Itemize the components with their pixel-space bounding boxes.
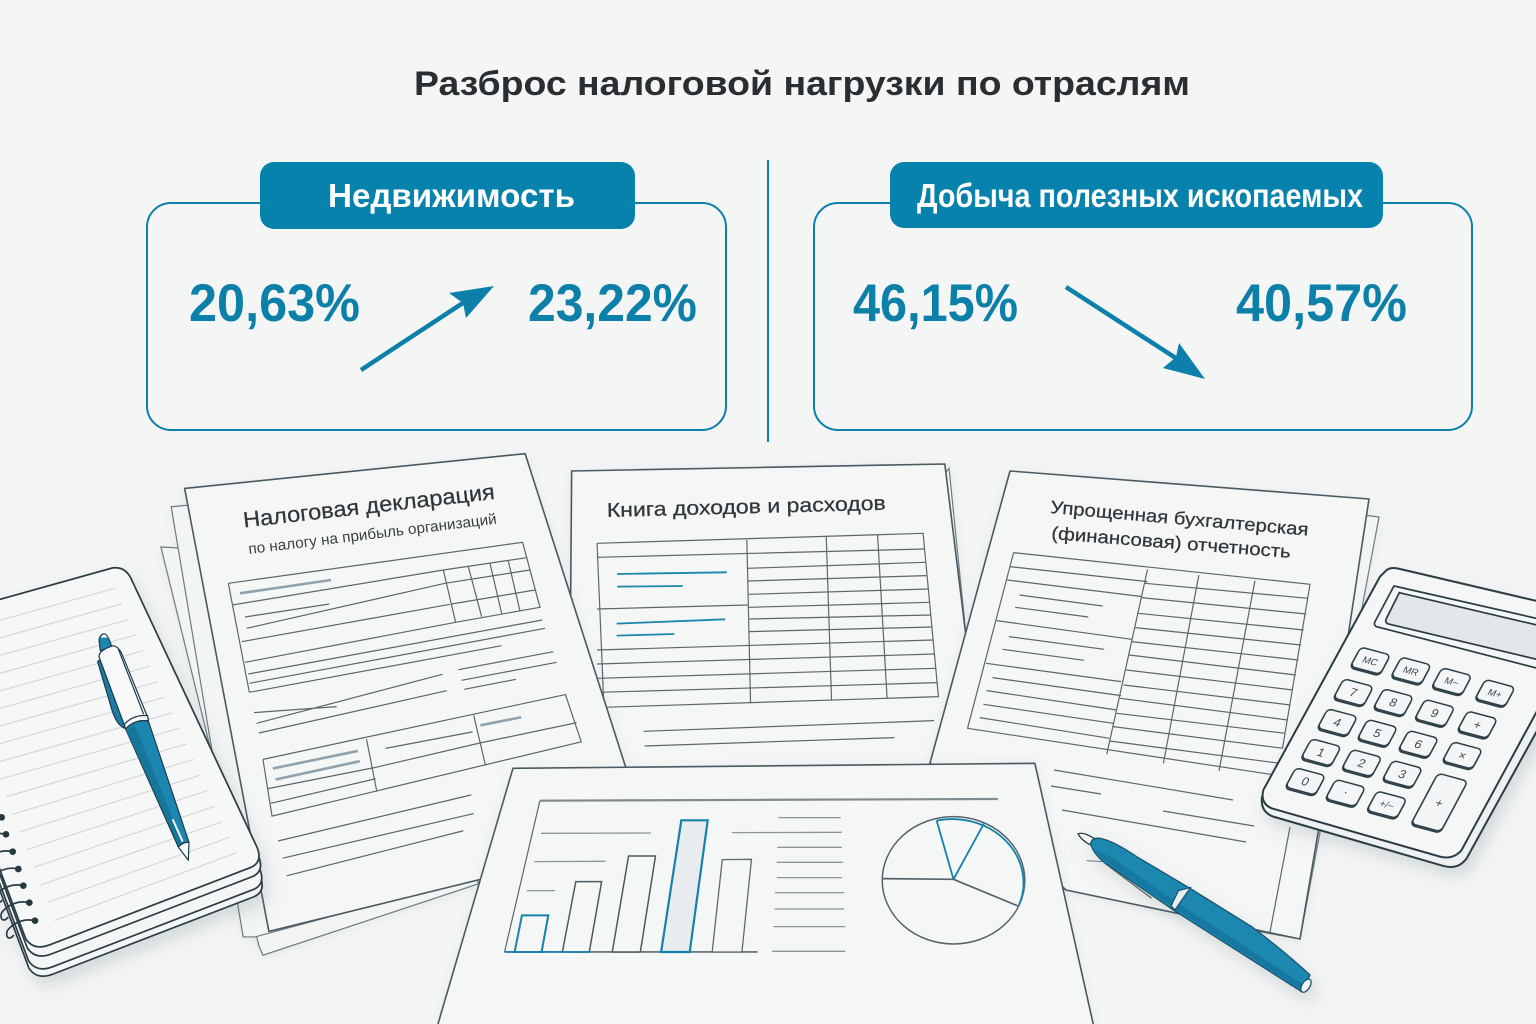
document title line 2: (финансовая) отчетность <box>1051 523 1292 562</box>
calculator <box>1262 568 1536 867</box>
keypad: 5 <box>1371 726 1384 740</box>
panel frame <box>147 203 726 430</box>
pen on documents <box>1078 833 1313 994</box>
heading: mining <box>890 162 1383 228</box>
notebook <box>0 568 262 976</box>
bar chart <box>505 820 751 952</box>
document title: Книга доходов и расходов <box>607 493 886 522</box>
document title: Налоговая декларация <box>242 479 496 532</box>
heading: real estate: Недвижимость <box>328 177 575 214</box>
document: tax return <box>161 454 648 955</box>
document: charts sheet <box>437 763 1094 1024</box>
keypad: 3 <box>1396 767 1409 781</box>
heading: mining: Добыча полезных ископаемых <box>917 177 1364 214</box>
document: simplified financial statements <box>930 471 1379 939</box>
value: start: 46,15% <box>853 274 1018 333</box>
keypad: + <box>1432 796 1446 810</box>
keypad: 8 <box>1387 696 1400 710</box>
form table <box>228 542 557 733</box>
keypad: 9 <box>1428 706 1441 720</box>
divider <box>767 160 769 442</box>
display <box>1374 586 1536 671</box>
panel frame <box>814 203 1472 430</box>
title: Разброс налоговой нагрузки по отраслям <box>414 65 1190 103</box>
keypad: + <box>1471 718 1484 732</box>
keypad: 6 <box>1412 737 1425 751</box>
document title line 1: Упрощенная бухгалтерская <box>1050 497 1309 540</box>
keypad: × <box>1456 749 1469 763</box>
value: start: 20,63% <box>189 274 360 333</box>
value: end: 40,57% <box>1236 274 1407 333</box>
keypad: 2 <box>1355 756 1368 770</box>
document subtitle: по налогу на прибыль организаций <box>247 511 498 558</box>
keypad <box>1285 647 1515 833</box>
heading: real estate <box>260 162 635 229</box>
value: end: 23,22% <box>528 274 697 333</box>
keypad: · <box>1341 785 1351 799</box>
axes and labels <box>505 799 998 952</box>
keypad: M− <box>1442 676 1461 689</box>
keypad: MC <box>1360 655 1380 669</box>
document: income and expense book <box>571 464 983 778</box>
keypad: MR <box>1401 665 1420 679</box>
panel: real estate <box>147 162 726 430</box>
pie chart <box>882 817 1025 944</box>
keypad: 4 <box>1331 716 1344 730</box>
arrow: down <box>1066 287 1205 379</box>
keypad: 7 <box>1347 686 1360 700</box>
pen on notebook <box>98 634 189 860</box>
keypad: 0 <box>1299 775 1312 789</box>
spiral binding <box>0 814 38 938</box>
keypad: 1 <box>1314 746 1328 760</box>
arrow: up <box>361 286 494 370</box>
keypad: M+ <box>1485 687 1504 701</box>
keypad: +/− <box>1377 799 1396 812</box>
panel: mining <box>814 162 1472 430</box>
